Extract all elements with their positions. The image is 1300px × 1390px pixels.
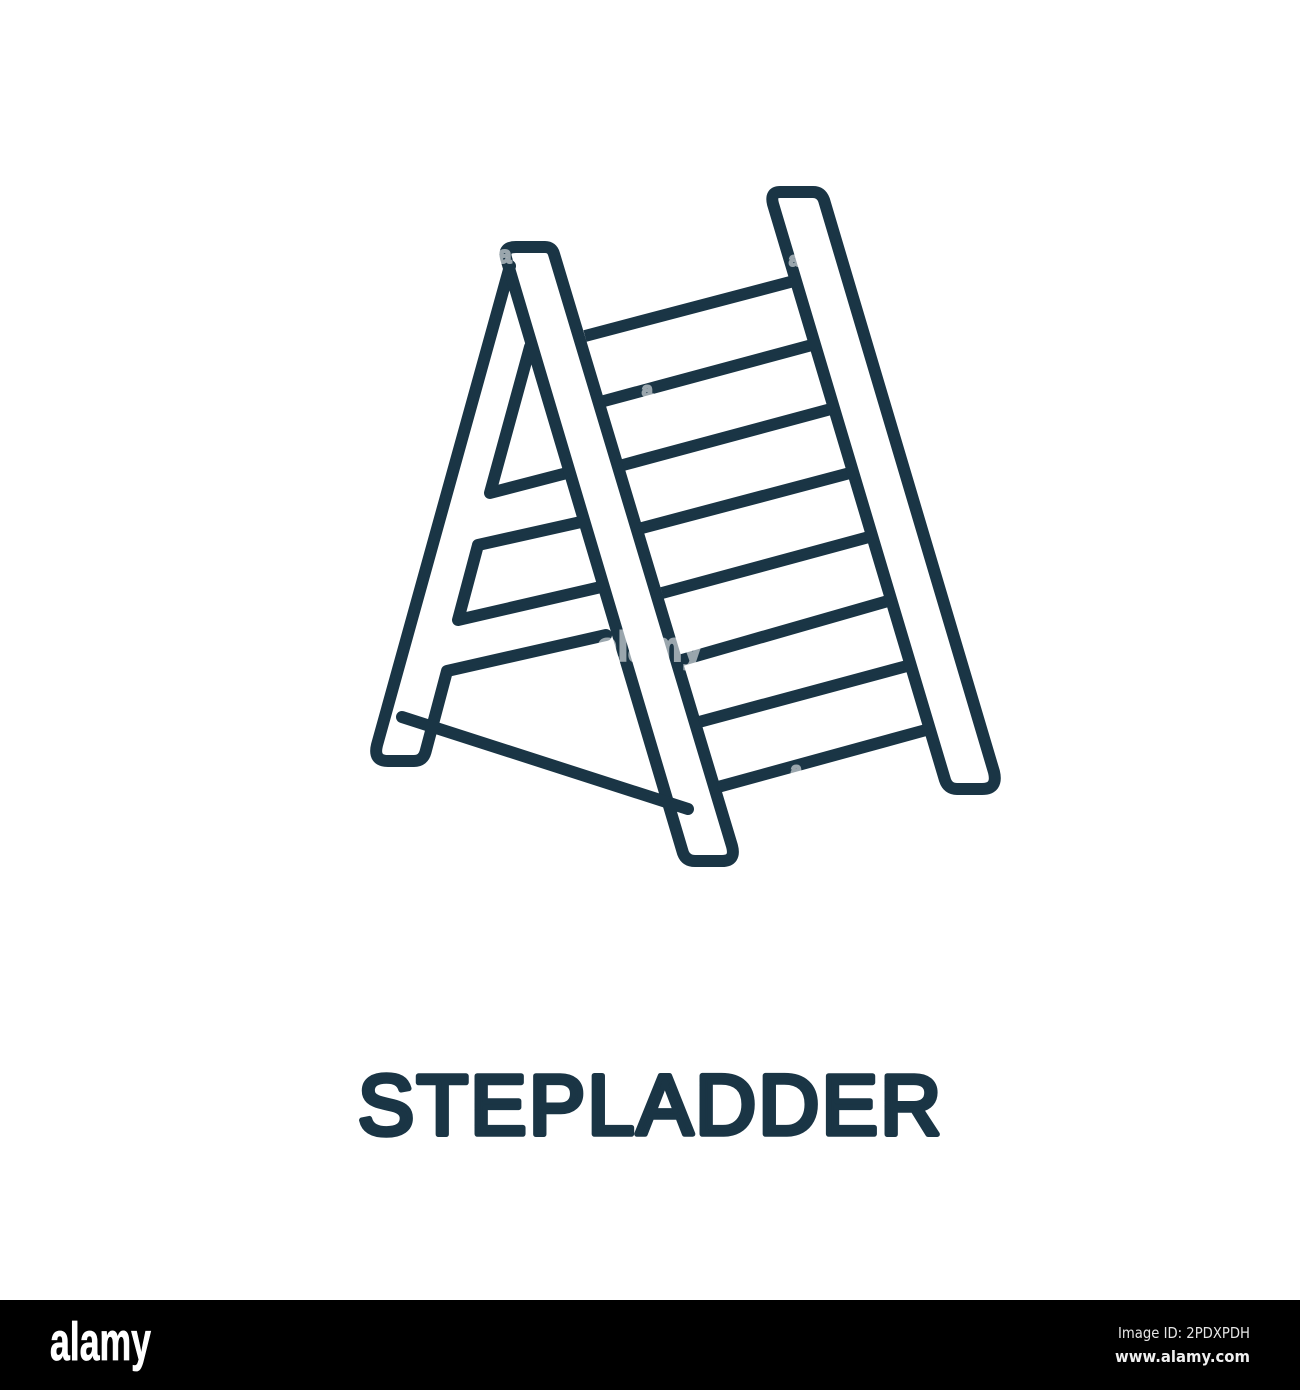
rear ladder right rail (772, 192, 995, 789)
spreader brace (402, 717, 688, 809)
image id: Image ID: 2PDXPDH (1118, 1324, 1250, 1342)
icon: stepladder (376, 192, 995, 861)
front ladder left rail (505, 247, 733, 861)
back support leg frame (376, 266, 606, 761)
title: STEPLADDER (358, 1058, 941, 1152)
watermark: alamy: a (791, 760, 802, 781)
watermark: alamy: a (642, 380, 653, 401)
footer bar (0, 1300, 1300, 1390)
footer logo: alamy (50, 1312, 151, 1372)
website: www.alamy.com (1115, 1347, 1250, 1366)
watermark: alamy (498, 242, 802, 781)
ladder steps (585, 281, 926, 787)
watermark: alamy: a (789, 250, 800, 271)
watermark: alamy: a (498, 242, 512, 269)
watermark: alamy: alamy (597, 623, 704, 670)
